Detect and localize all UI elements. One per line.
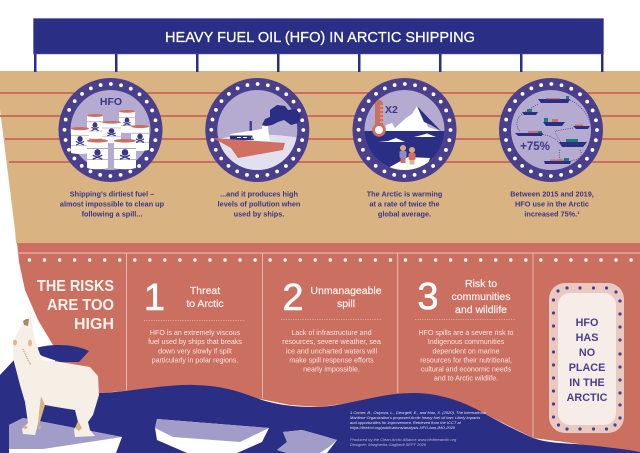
caption 2: levels of pollution when bbox=[218, 200, 300, 208]
risk 2: 2 bbox=[282, 277, 304, 319]
icon: ship routes +75% bbox=[499, 78, 603, 182]
heading: the risks are too high: HIGH bbox=[74, 316, 114, 333]
risk 1: HFO is an extremely viscous bbox=[150, 329, 241, 337]
sign: HFO has no place in the Arctic: ARCTIC bbox=[567, 392, 608, 404]
caption 3: The Arctic is warming bbox=[367, 190, 442, 198]
title banner: HEAVY FUEL OIL (HFO) IN ARCTIC SHIPPING bbox=[165, 30, 475, 46]
caption 4: increased 75%.¹ bbox=[524, 210, 580, 218]
risk 1: fuel used by ships that breaks bbox=[148, 338, 242, 346]
risk 2 bbox=[281, 277, 382, 374]
risk 3: dependent on marine bbox=[432, 348, 500, 356]
risk 3: and to Arctic wildlife. bbox=[434, 374, 498, 382]
risk 3: Risk to bbox=[465, 278, 497, 290]
navy ridge behind bear bbox=[33, 345, 89, 362]
risk 2: nearly impossible. bbox=[303, 366, 360, 374]
caption 4: Between 2015 and 2019, bbox=[510, 190, 594, 198]
risk 2: make spill response efforts bbox=[289, 356, 374, 364]
heading: the risks are too high: THE RISKS bbox=[37, 278, 114, 295]
sea wave bbox=[0, 360, 640, 453]
caption 1: Shipping's dirtiest fuel – bbox=[70, 190, 154, 198]
risk 1: down very slowly if spilt bbox=[158, 348, 232, 356]
risk 2: resources, severe weather, sea bbox=[282, 338, 381, 346]
risk 2: Lack of infrastructure and bbox=[291, 329, 372, 337]
caption 2: used by ships. bbox=[234, 210, 284, 218]
polar bear bbox=[13, 316, 99, 437]
risk 1 bbox=[144, 277, 245, 364]
risk 3: cultural and economic needs bbox=[421, 366, 512, 374]
sign: HFO has no place in the Arctic: NO bbox=[579, 347, 595, 359]
risk 2: Unmanageable bbox=[310, 285, 382, 297]
footnote: Maritime Organization's proposed Arctic heavy fuel oil ban: Likely impacts bbox=[350, 415, 480, 420]
risk 3: and wildlife bbox=[455, 304, 507, 316]
hull background: tan deck bbox=[0, 71, 640, 243]
caption 4: HFO use in the Arctic bbox=[515, 200, 589, 208]
risk 1: to Arctic bbox=[186, 298, 224, 310]
caption 3: global average. bbox=[378, 210, 431, 218]
ice floes bbox=[9, 418, 337, 453]
risk 2: ice and uncharted waters will bbox=[286, 348, 377, 356]
sign: HFO has no place in the Arctic: IN THE bbox=[569, 377, 605, 389]
icon: warming arctic: X2 bbox=[385, 104, 398, 116]
caption 3: at a rate of twice the bbox=[369, 200, 440, 208]
credits: Designer: Margherita Gagliardi SEPT 2020 bbox=[350, 442, 427, 447]
caption 2: ...and it produces high bbox=[220, 190, 298, 198]
icon: HFO barrels: HFO bbox=[100, 96, 122, 108]
icon: HFO barrels bbox=[58, 78, 162, 182]
sign: HFO has no place in the Arctic: HAS bbox=[576, 332, 598, 344]
sign: HFO has no place in the Arctic bbox=[549, 283, 624, 433]
risk 3: resources for their nutritional, bbox=[420, 356, 512, 364]
footnote: https://theicct.org/publications/analysis-HFO-ban-IMO-2020 bbox=[350, 425, 456, 430]
caption 1: almost impossible to clean up bbox=[60, 200, 165, 208]
heading: the risks are too high: ARE TOO bbox=[47, 297, 114, 314]
title banner bbox=[34, 18, 604, 72]
footnote: and opportunities for improvement. Retrieved from the ICCT at bbox=[350, 420, 462, 425]
risk 3: HFO spills are a severe risk to bbox=[418, 329, 514, 337]
risk 1: particularly in polar regions. bbox=[152, 356, 238, 364]
risk 1: Threat bbox=[190, 285, 220, 297]
heading: the risks are too high bbox=[37, 278, 114, 333]
icon: ship with smoke bbox=[205, 78, 309, 182]
risk 1: 1 bbox=[144, 277, 165, 319]
footnote: 1 Comer, B., Osipova, L., Georgeff, E., and Mao, X. (2020). The International bbox=[350, 410, 486, 415]
icon: ship routes +75%: +75% bbox=[520, 141, 550, 153]
risk 3: Indigenous communities bbox=[428, 338, 505, 346]
sign: HFO has no place in the Arctic: HFO bbox=[576, 317, 598, 329]
sign: HFO has no place in the Arctic: PLACE bbox=[569, 362, 605, 374]
caption 1: following a spill... bbox=[82, 210, 142, 218]
risk 3: 3 bbox=[417, 276, 439, 318]
panel: red risks band bbox=[17, 243, 640, 453]
credits: Produced by the Clean Arctic Alliance www.hfofreearctic.org bbox=[350, 437, 457, 442]
icon: warming arctic bbox=[352, 78, 456, 182]
risk 2: spill bbox=[337, 298, 355, 310]
risk 3: communities bbox=[452, 291, 510, 303]
risk 3 bbox=[415, 276, 516, 382]
